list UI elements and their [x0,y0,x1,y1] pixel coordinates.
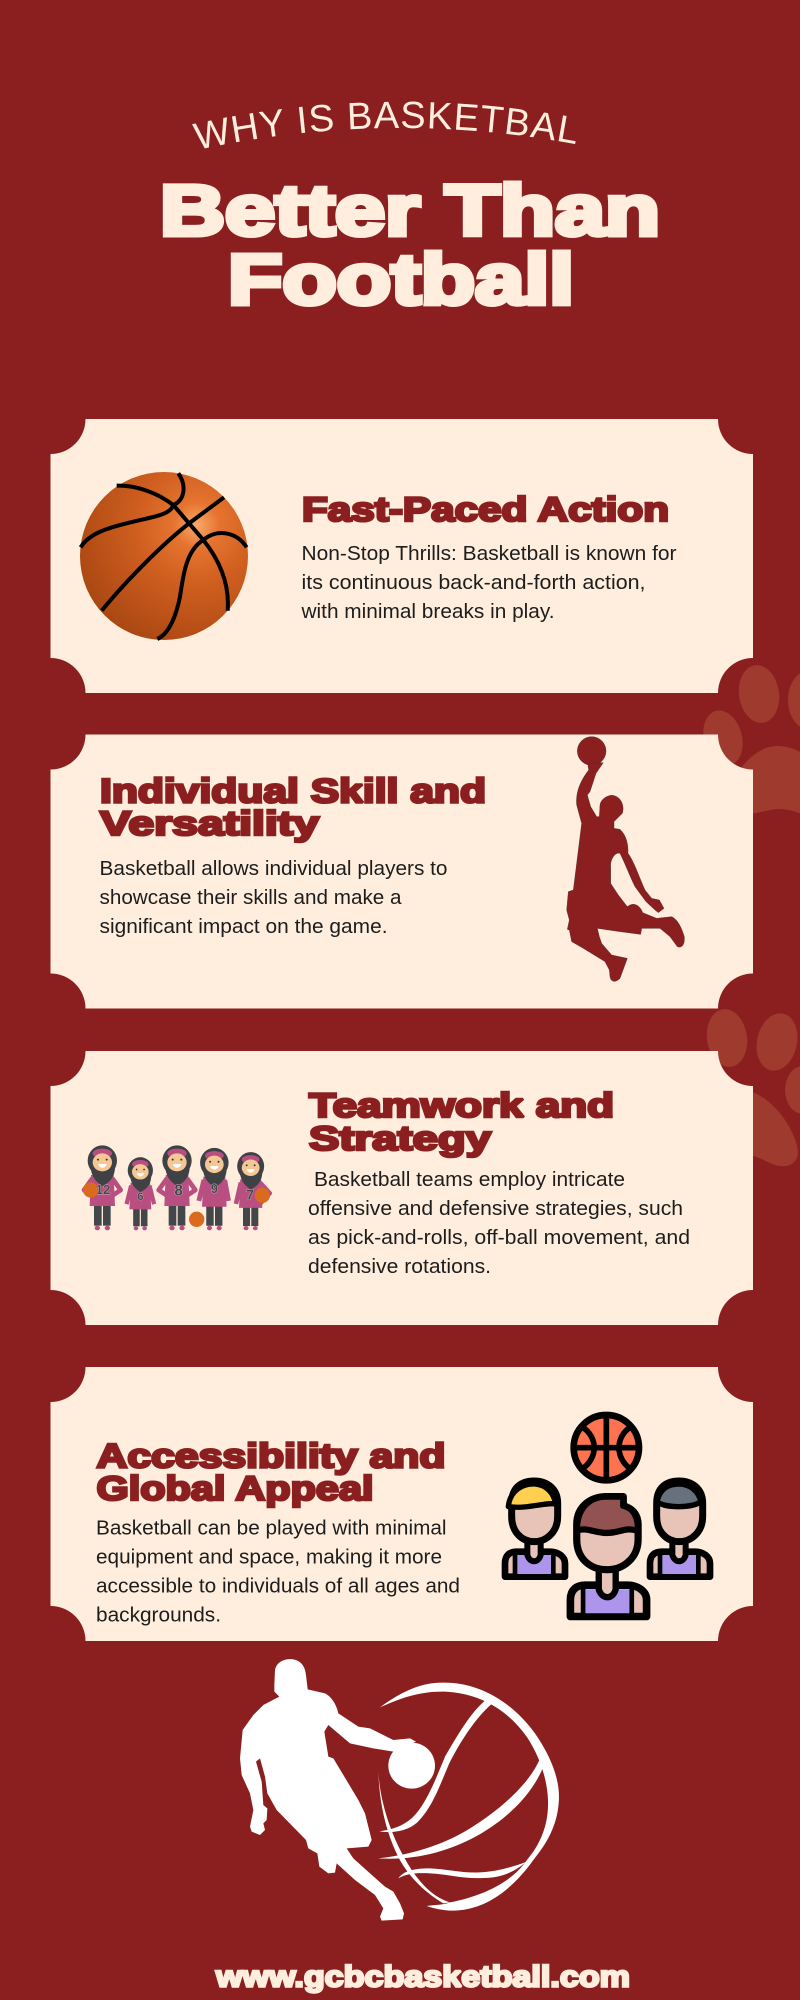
body text [300,543,677,623]
heading [309,1087,614,1158]
body text: backgrounds. [96,1605,221,1627]
illustration: swoosh basketball [378,1683,559,1911]
icon: ball [574,1415,639,1480]
heading: Global Appeal [96,1470,374,1508]
title: Better Than [160,172,660,251]
body text [96,1518,460,1627]
heading: Teamwork and [309,1087,614,1125]
card background [50,1367,753,1641]
icon: three players and ball [505,1415,710,1617]
body text: significant impact on the game. [100,916,388,938]
body text: Basketball allows individual players to [100,858,448,880]
heading [96,1437,446,1508]
card background [50,734,753,1008]
icon: right player [650,1481,710,1577]
body text: equipment and space, making it more [96,1547,442,1569]
body text: Basketball teams employ intricate [314,1169,625,1191]
panel: fast-paced action [50,419,753,693]
body text: with minimal breaks in play. [300,601,554,623]
footer url: www.gcbcbasketball.com [215,1960,630,1994]
paw print: lower [703,1006,800,1166]
icon: left player [505,1481,565,1577]
body text: defensive rotations. [308,1256,491,1278]
body text: its continuous back-and-forth action, [302,572,646,594]
illustration: dribbling player silhouette [240,1659,435,1921]
heading: Individual Skill and [100,772,486,810]
illustration: team of five players: 12 [96,1182,110,1197]
card background [50,419,753,693]
paw print: upper [697,662,800,835]
heading [100,772,486,843]
panel: accessibility and global appeal [50,1367,753,1641]
icon: basketball [80,472,248,640]
illustration: team of five players [83,1145,270,1230]
body text: offensive and defensive strategies, such [308,1198,683,1220]
illustration: team of five players: 7 [246,1186,254,1202]
illustration: team of five players: 9 [211,1181,218,1196]
heading: Versatility [100,805,319,843]
icon: centre player [570,1497,647,1617]
body text: Basketball can be played with minimal [96,1518,446,1540]
panel: individual skill [50,734,753,1008]
body text: showcase their skills and make a [100,887,402,909]
illustration: team of five players: 8 [174,1183,183,1200]
body text [308,1169,690,1278]
title: Football [228,241,574,320]
illustration: team of five players: 6 [137,1191,144,1203]
body text: Non-Stop Thrills: Basketball is known for [302,543,677,565]
body text: as pick-and-rolls, off-ball movement, and [308,1227,690,1249]
icon: dunking player silhouette [567,737,684,981]
body text [100,858,448,938]
title [160,172,660,320]
heading: Strategy [309,1120,491,1158]
heading: Fast-Paced Action [302,491,669,529]
body text: accessible to individuals of all ages and [96,1576,460,1598]
curved subtitle [192,102,576,148]
heading: Accessibility and [96,1437,446,1475]
card background [50,1051,753,1325]
panel: teamwork and strategy [50,1051,753,1325]
